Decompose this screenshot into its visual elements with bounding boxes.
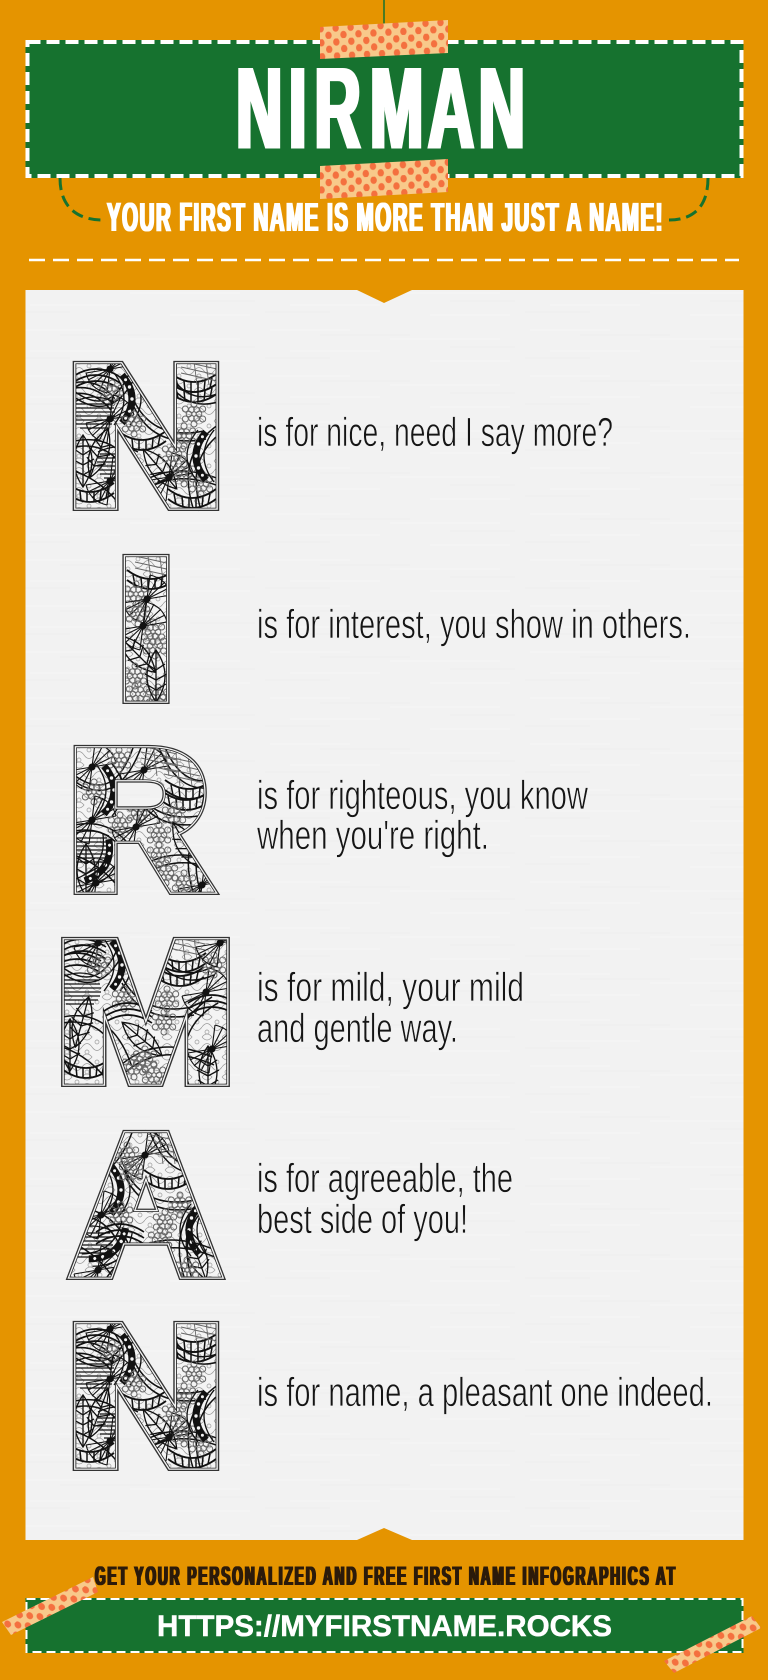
letter I: I bbox=[117, 520, 175, 738]
letter N: N bbox=[67, 327, 225, 545]
letter R: R bbox=[68, 711, 210, 929]
tape top bbox=[320, 20, 448, 59]
top notch bbox=[357, 290, 412, 303]
left green dashed bracket bbox=[60, 178, 103, 220]
text: M lines: is for mild, your mild bbox=[257, 964, 524, 1010]
text: R lines: is for righteous, you know bbox=[257, 772, 588, 818]
text: N line: is for nice, need I say more? bbox=[257, 409, 613, 455]
text: A lines: is for agreeable, the bbox=[257, 1155, 513, 1201]
letter A: A bbox=[72, 1096, 220, 1314]
url text: HTTPS://MYFIRSTNAME.ROCKS bbox=[157, 1610, 612, 1643]
letter R: R bbox=[68, 711, 210, 929]
letter R: R bbox=[68, 711, 210, 929]
paper panel bbox=[26, 290, 744, 1540]
letter N: N bbox=[67, 327, 225, 545]
letter N second: N bbox=[67, 1287, 225, 1505]
title text: NIRMAN bbox=[236, 44, 525, 174]
text: A lines: best side of you! bbox=[257, 1196, 468, 1242]
text: R lines: when you're right. bbox=[256, 812, 489, 858]
white dashed divider bbox=[29, 259, 739, 261]
letter N: N bbox=[67, 327, 225, 545]
tape bottom bbox=[320, 159, 448, 199]
text: A lines bbox=[257, 1155, 513, 1242]
hanging green string bbox=[383, 0, 385, 26]
letter A: A bbox=[72, 1096, 220, 1314]
tape bottom left bbox=[2, 1577, 98, 1635]
letter R: R bbox=[68, 711, 210, 929]
letter A: A bbox=[72, 1096, 220, 1314]
letter M: M bbox=[56, 903, 236, 1121]
right green dashed bracket bbox=[669, 178, 708, 220]
letter N second: N bbox=[67, 1287, 225, 1505]
bottom notch bbox=[357, 1528, 412, 1540]
letter N: N bbox=[67, 327, 225, 545]
letter N second: N bbox=[67, 1287, 225, 1505]
text: R lines bbox=[256, 772, 588, 858]
tape bottom right bbox=[664, 1616, 761, 1673]
title banner bbox=[26, 40, 744, 178]
letter M: M bbox=[56, 903, 236, 1121]
letter N second: N bbox=[67, 1287, 225, 1505]
letter I: I bbox=[117, 520, 175, 738]
letter I: I bbox=[117, 520, 175, 738]
text: M lines: and gentle way. bbox=[257, 1005, 458, 1051]
letter A: A bbox=[72, 1096, 220, 1314]
letter M: M bbox=[56, 903, 236, 1121]
text: M lines bbox=[257, 964, 524, 1051]
footer url banner bbox=[26, 1598, 744, 1653]
letter M: M bbox=[56, 903, 236, 1121]
letter I: I bbox=[117, 520, 175, 738]
